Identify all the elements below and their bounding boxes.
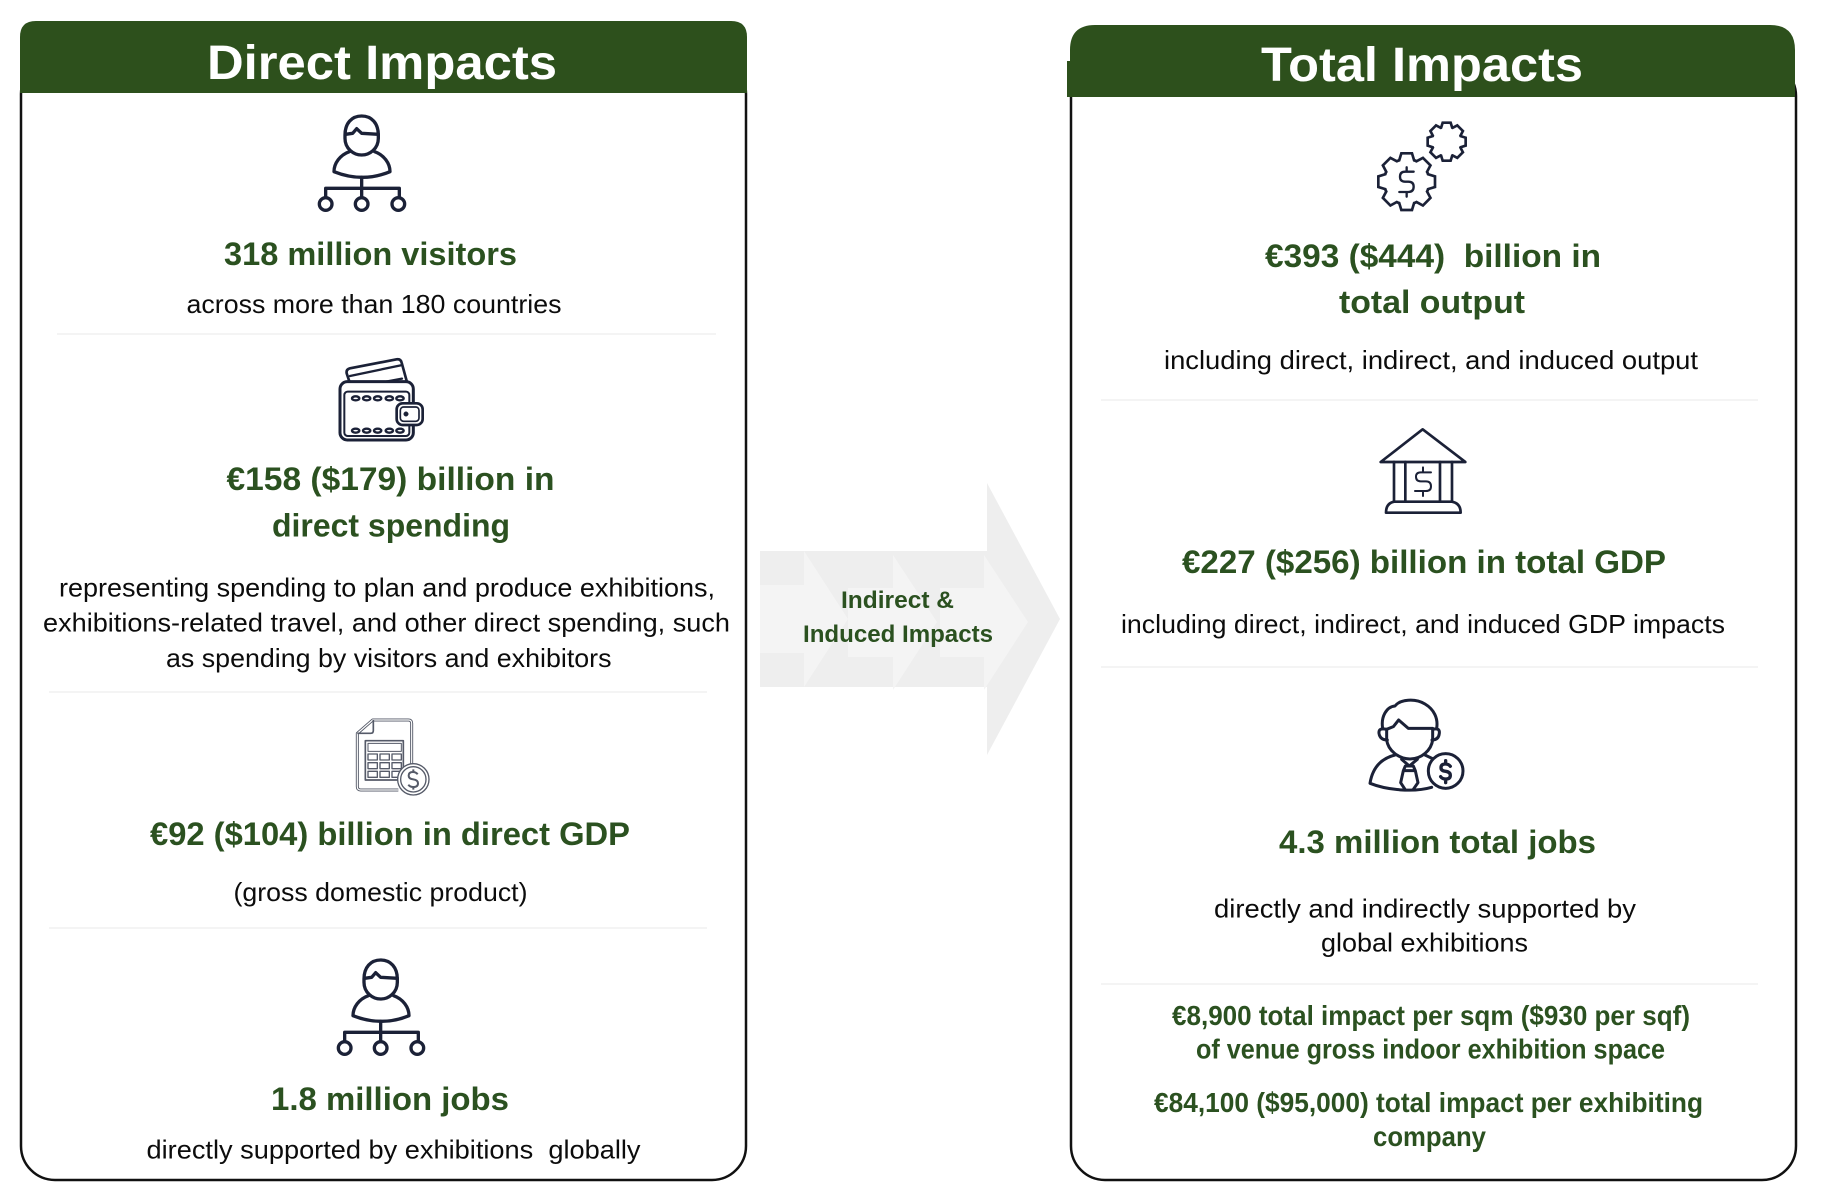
arrow shape (760, 483, 1060, 755)
arrow label (803, 587, 993, 648)
stat: impact per sqm: of venue gross indoor exhibition space (1196, 1034, 1665, 1064)
stat: direct spending (226, 461, 554, 544)
stat: total output: total output (1339, 284, 1525, 320)
text: direct spending detail: representing spending to plan and produce exhibitions, (59, 572, 715, 602)
stat: visitors: 318 million visitors (224, 236, 517, 272)
text: direct spending detail: exhibitions-related travel, and other direct spending, such (43, 608, 730, 638)
stat: impact per sqm: €8,900 total impact per sqm ($930 per sqf) (1172, 1000, 1690, 1031)
panel: direct impacts (20, 21, 747, 1180)
text: total jobs detail (1214, 894, 1636, 958)
stat: impact per exhibiting company: company (1373, 1121, 1486, 1152)
inner chevron arrows (760, 551, 1028, 690)
header bar: total impacts (1067, 25, 1795, 97)
heading: total impacts: Total Impacts (1261, 39, 1583, 92)
stat: direct jobs: 1.8 million jobs (271, 1081, 509, 1117)
stat: total output (1265, 238, 1601, 320)
text: direct GDP detail: (gross domestic product) (234, 877, 528, 907)
stat: direct spending: €158 ($179) billion in (226, 461, 554, 497)
text: total jobs detail: directly and indirectly supported by (1214, 894, 1636, 924)
stat: total output: €393 ($444) billion in (1265, 238, 1601, 274)
stat: impact per exhibiting company: €84,100 ($95,000) total impact per exhibiting (1154, 1087, 1703, 1118)
header bar: direct impacts (20, 21, 747, 93)
panel: total impacts (1067, 25, 1796, 1180)
stat: direct spending: direct spending (272, 508, 510, 544)
stat: direct GDP: €92 ($104) billion in direct GDP (150, 816, 630, 852)
text: total output detail: including direct, indirect, and induced output (1164, 345, 1699, 375)
icon: bank (1381, 429, 1465, 513)
text: total jobs detail: global exhibitions (1321, 928, 1528, 958)
icon: businessman with coin (1370, 700, 1463, 790)
arrow label: Indirect & (841, 587, 954, 614)
panel outline: total impacts (1071, 62, 1796, 1180)
text: total GDP detail: including direct, indirect, and induced GDP impacts (1121, 609, 1725, 639)
icon: person network jobs (338, 960, 424, 1054)
heading: direct impacts: Direct Impacts (207, 37, 557, 90)
stat: total jobs: 4.3 million total jobs (1279, 824, 1596, 860)
text: direct spending detail: as spending by visitors and exhibitors (166, 643, 612, 673)
arrow label: Induced Impacts (803, 621, 993, 648)
arrow: indirect and induced impacts (760, 483, 1060, 755)
stat: impact per sqm (1172, 1000, 1690, 1064)
stat: total GDP: €227 ($256) billion in total GDP (1182, 544, 1666, 580)
icon: calculator document (357, 720, 429, 795)
text: direct jobs detail: directly supported by exhibitions globally (146, 1134, 640, 1164)
stat: impact per exhibiting company (1154, 1087, 1703, 1152)
panel outline: direct impacts (21, 60, 746, 1180)
icon: dollar gears (1380, 124, 1464, 209)
icon: wallet (340, 359, 423, 440)
text: direct spending detail (43, 572, 730, 673)
text: visitors detail: across more than 180 countries (186, 289, 562, 319)
icon: person network visitors (319, 116, 405, 210)
